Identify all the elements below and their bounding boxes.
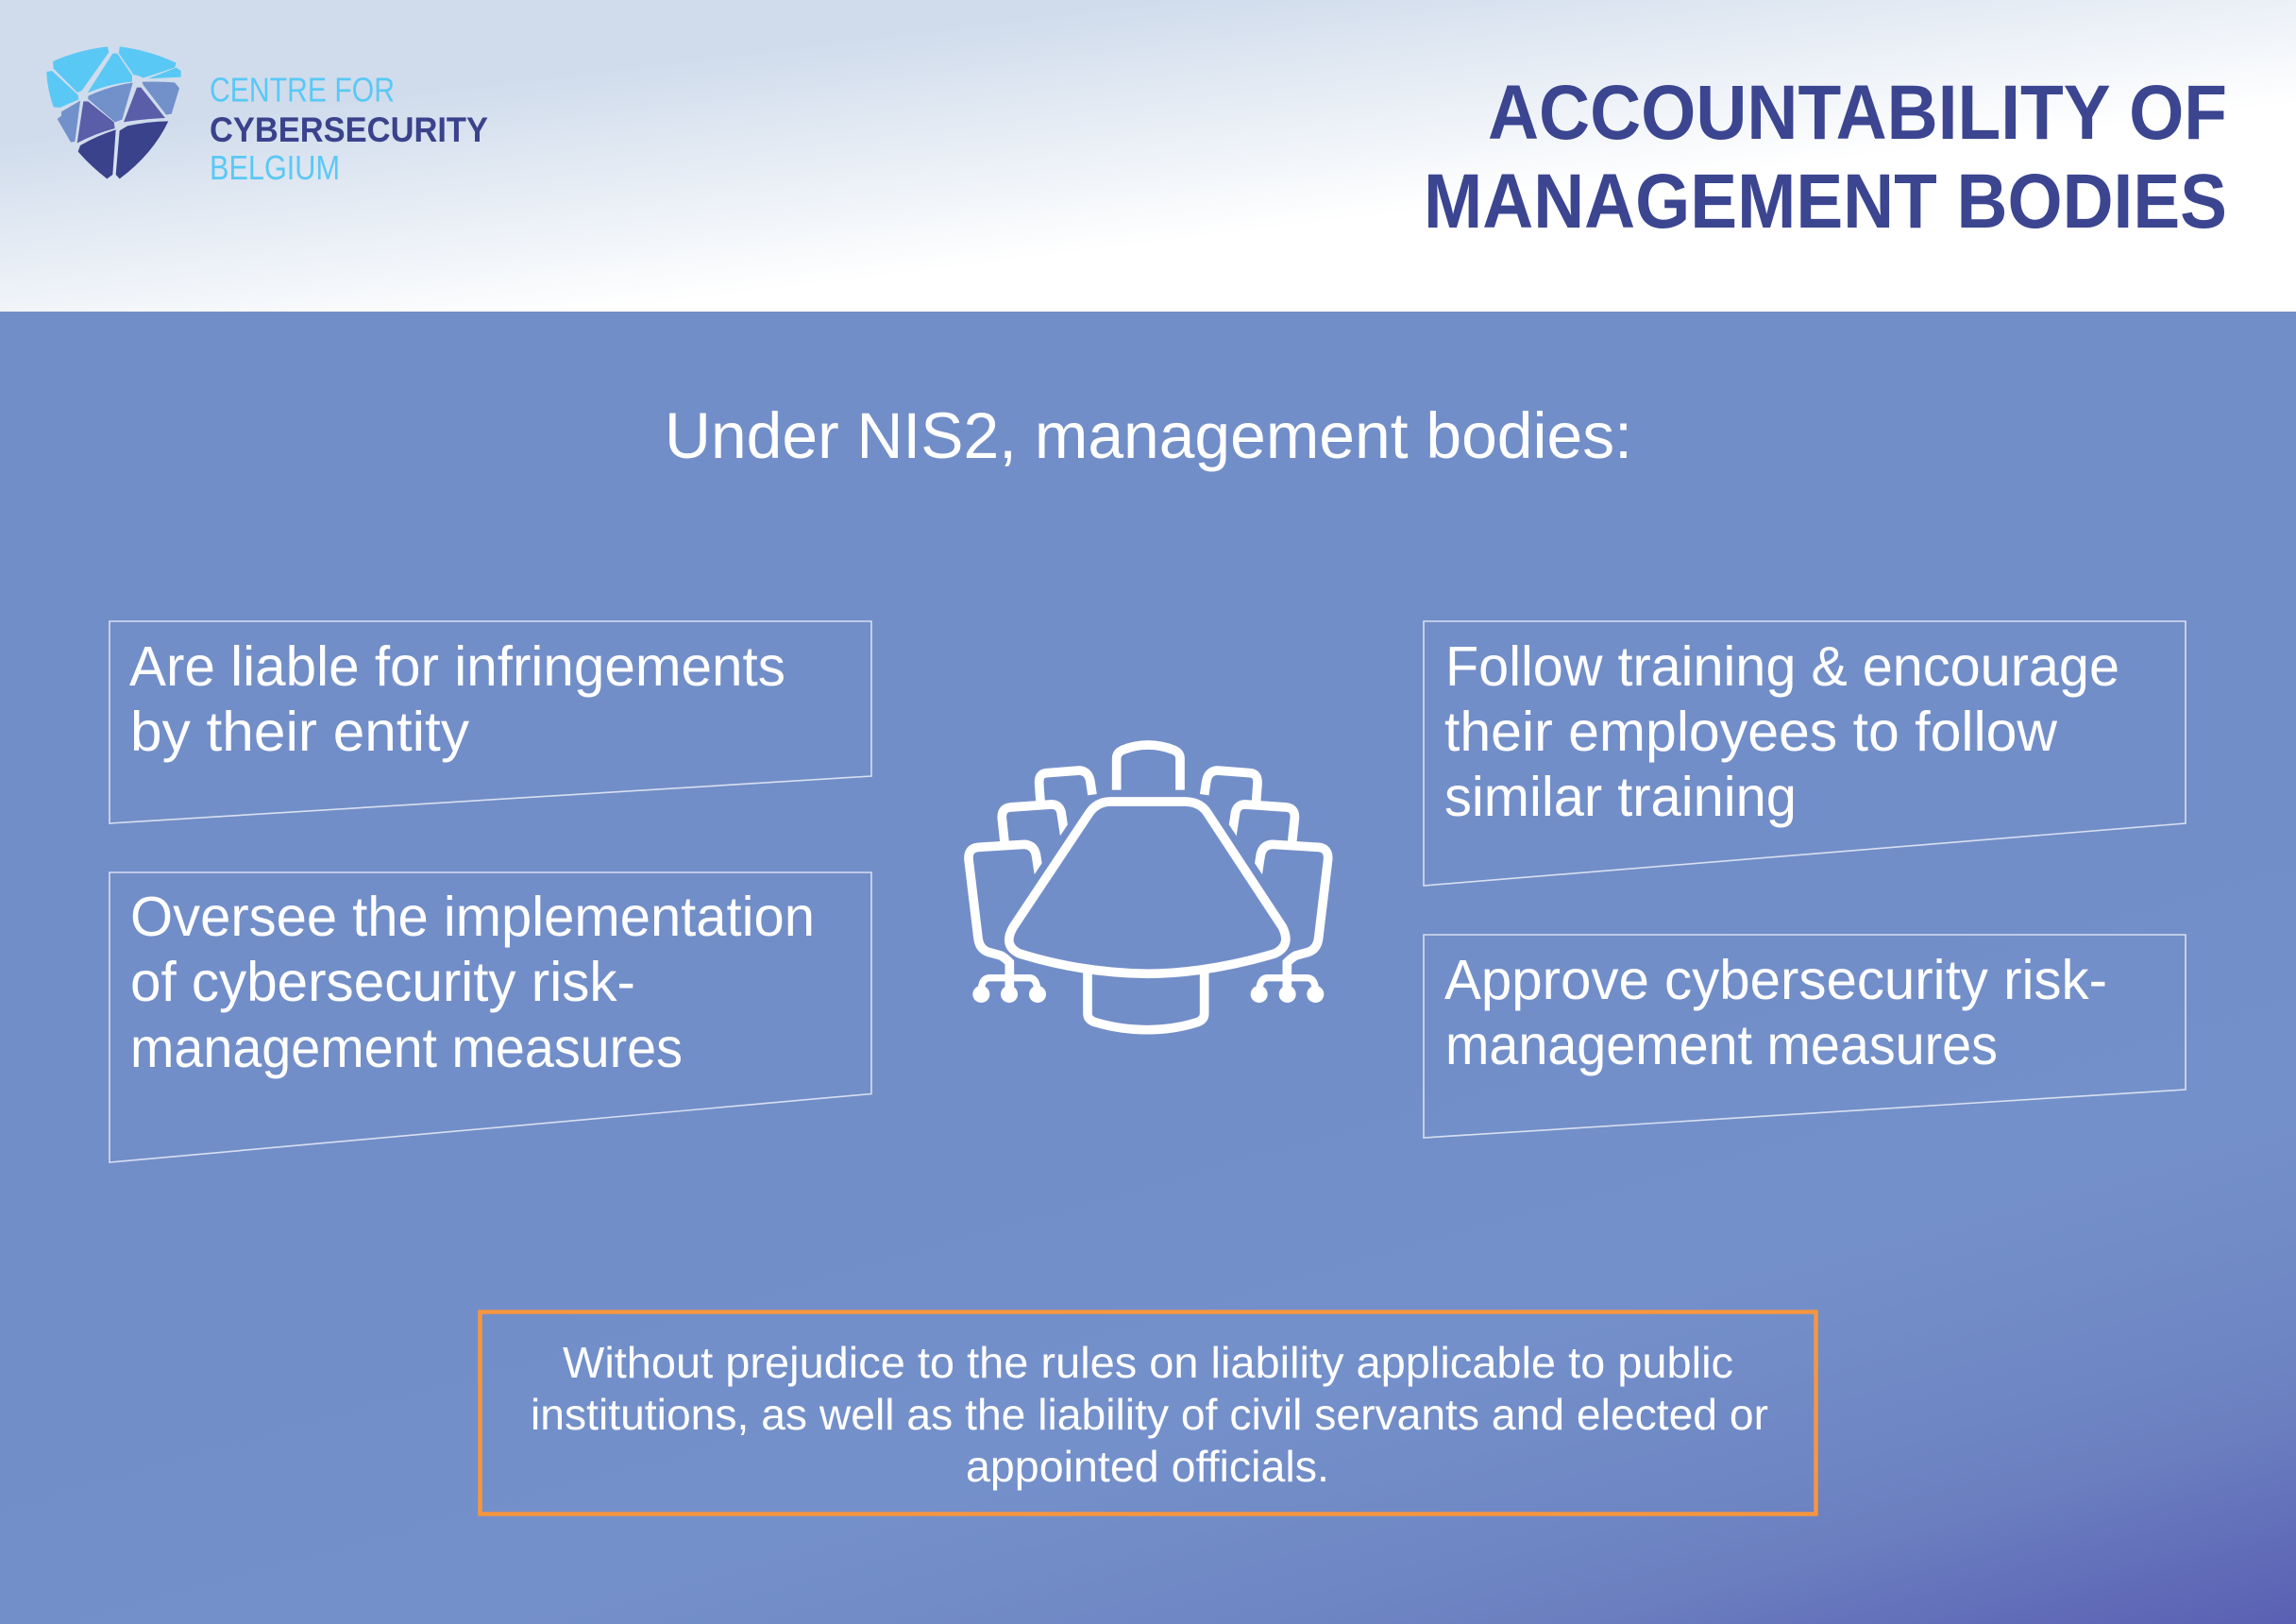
subheading: Under NIS2, management bodies: [665,399,1632,472]
right chairs [1205,770,1328,1003]
panel: oversee implementation: management measures [130,1017,683,1079]
table base [1088,973,1205,1030]
callout: liability note: institutions, as well as the liability of civil servants and elected or [531,1390,1768,1439]
panel: follow training [1424,621,2186,886]
callout: liability note: Without prejudice to the rules on liability applicable to public [563,1338,1733,1387]
logo text: centre for: CENTRE FOR [210,70,395,110]
panel: follow training: similar training [1444,766,1797,828]
panel: follow training: their employees to follow [1444,701,2057,763]
callout: liability note: appointed officials. [966,1442,1329,1491]
title: MANAGEMENT BODIES [1424,159,2227,245]
panel: oversee implementation: Oversee the implementation [130,886,815,948]
panel: approve measures [1424,935,2186,1138]
callout: liability note [480,1312,1816,1514]
icon: shield mosaic [46,46,181,178]
title: ACCOUNTABILITY OF [1488,70,2227,156]
table top [1009,802,1286,973]
panel: approve measures: management measures [1445,1014,1998,1076]
panel: follow training: Follow training & encourage [1445,635,2119,698]
panel: liable for infringements: by their entity [130,701,470,763]
title [1424,70,2227,245]
panel: liable for infringements [110,621,871,823]
header band [0,0,2296,312]
icon: boardroom table with chairs [969,745,1328,1030]
top chair [1117,745,1180,790]
panel: approve measures: Approve cybersecurity risk- [1444,949,2107,1011]
panel: oversee implementation: of cybersecurity risk- [130,951,635,1013]
panel: liable for infringements: Are liable for infringements [129,635,785,698]
table clearance gaps [1013,814,1283,927]
logo text: belgium: BELGIUM [210,148,340,187]
logo text: cybersecurity: CYBERSECURITY [210,110,488,149]
left chairs [969,770,1092,1003]
panel: oversee implementation [110,872,871,1162]
logo: Centre for Cybersecurity Belgium [46,46,488,187]
